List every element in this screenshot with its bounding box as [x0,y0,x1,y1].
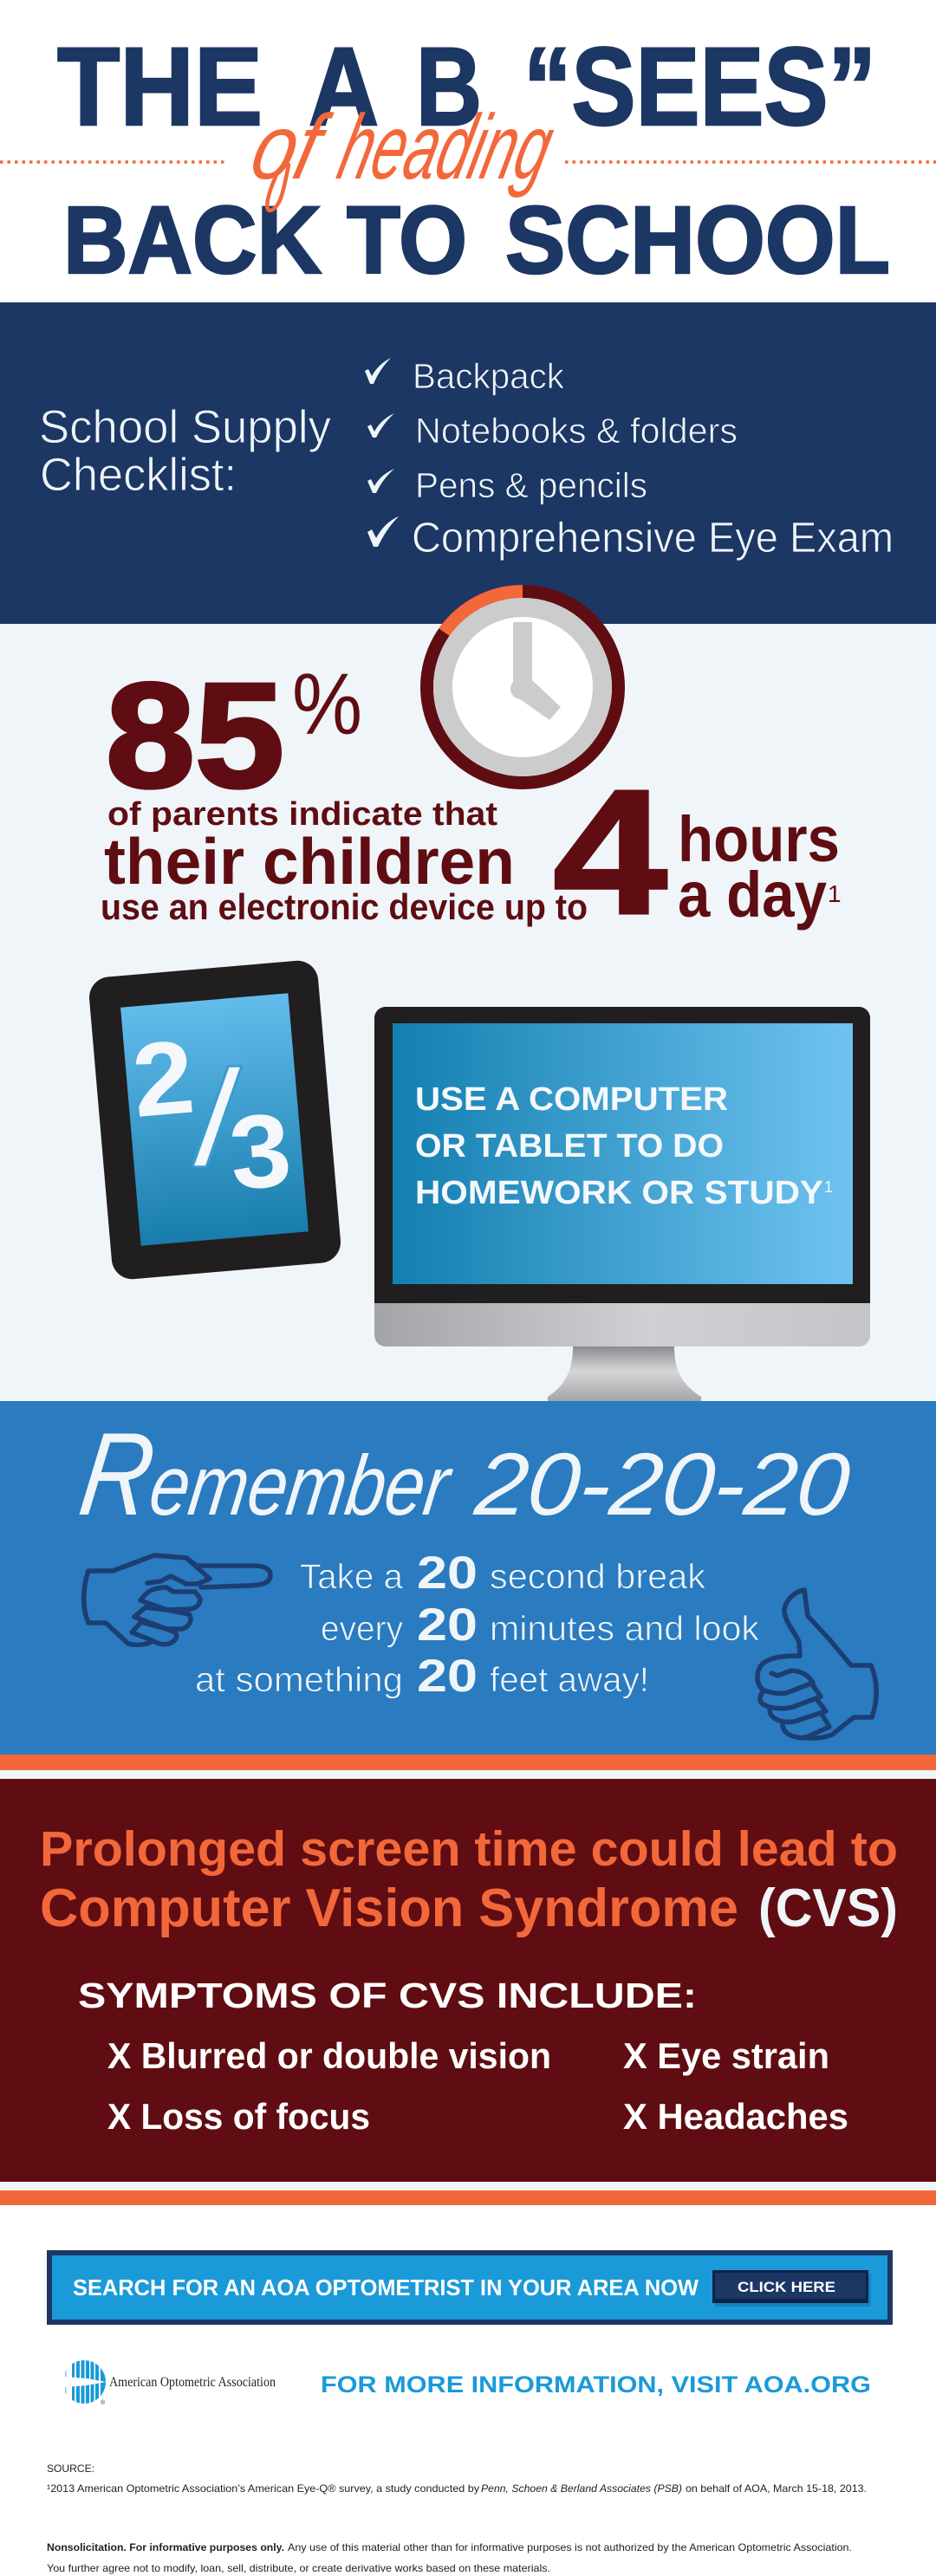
symptoms list: X Blurred or double vision [107,2035,551,2076]
title line 2: TO [347,187,467,294]
title line 1: B [416,25,482,149]
check marks [365,358,399,547]
title line 2: BACK [63,187,322,294]
logo wordmark: American Optometric Association [109,2375,276,2390]
title line 1 [57,25,876,149]
20-20-20 rule text: 20 [417,1651,478,1702]
script subtitle: heading [329,95,563,198]
orange divider [0,2190,936,2205]
more information link: FOR MORE INFORMATION, VISIT AOA.ORG [321,2372,871,2398]
title block [0,25,936,294]
heading: remember: 20-20-20 [471,1434,855,1534]
checklist items [412,356,894,561]
icon: tablet with two thirds [88,959,342,1281]
title line 2 [63,187,890,294]
orange divider [0,1755,936,1770]
script subtitle [242,95,563,211]
logo mark: ® [101,2399,106,2406]
checklist items: Pens & pencils [415,465,647,505]
button: click here [712,2270,871,2307]
monitor caption: OR TABLET TO DO [415,1128,724,1165]
symptoms list: X Eye strain [623,2035,829,2076]
checklist items: Notebooks & folders [415,411,738,451]
icon: tablet with two thirds: 3 [225,1091,296,1212]
icon: pointing hand [84,1555,270,1645]
disclaimer [47,2541,852,2574]
monitor caption: HOMEWORK OR STUDY [415,1175,823,1211]
light divider gap [0,2182,936,2190]
heading: remember [73,1408,855,1540]
title line 2: SCHOOL [505,187,890,294]
statistic: 85 percent: % [292,656,362,753]
statistic: 4 hours a day: 4 [553,753,667,951]
title line 1: THE [57,25,263,149]
monitor caption [415,1081,833,1211]
20-20-20 rule text [195,1548,760,1702]
symptoms heading: SYMPTOMS OF CVS INCLUDE: [78,1976,697,2015]
disclaimer: Any use of this material other than for informative purposes is not authorized by the American Optometric Association. [288,2541,852,2553]
monitor caption: 1 [824,1178,833,1196]
statistic: 85 percent: of parents indicate that [107,796,497,833]
panel: school supply checklist [0,302,936,624]
statistic: 4 hours a day: hours [678,803,840,875]
20-20-20 rule text: Take a [300,1558,404,1596]
source note [47,2462,867,2495]
checklist items: Backpack [413,356,564,396]
button: click here: CLICK HERE [738,2279,835,2295]
panel: screen use statistics [0,591,936,1401]
checklist heading: School Supply [39,401,331,453]
20-20-20 rule text: 20 [417,1599,478,1651]
icon: clock [426,591,619,783]
panel: remember 20-20-20 [0,1401,936,1755]
statistic: 4 hours a day [553,753,842,951]
heading: prolonged screen time: (CVS) [758,1878,898,1938]
banner: search for an optometrist [49,2253,890,2322]
title line 1: A [309,25,379,149]
banner text: SEARCH FOR AN AOA OPTOMETRIST IN YOUR AREA NOW [73,2274,699,2300]
icon: desktop monitor [374,1007,870,1401]
icon: thumbs up [757,1590,876,1738]
heading: prolonged screen time [40,1821,898,1938]
20-20-20 rule text: at something [195,1661,403,1699]
dotted rule [0,160,936,164]
20-20-20 rule text: feet away! [490,1661,649,1699]
20-20-20 rule text: every [321,1610,403,1648]
panel: computer vision syndrome [0,1779,936,2182]
logo: american optometric association [64,2360,276,2406]
icon: tablet with two thirds: / [192,1042,242,1195]
source note: ¹2013 American Optometric Association’s American Eye-Q® survey, a study conducted by [47,2482,479,2495]
symptoms list: X Headaches [623,2096,848,2137]
source note: Penn, Schoen & Berland Associates (PSB) [481,2482,682,2495]
disclaimer: You further agree not to modify, loan, sell, distribute, or create derivative works based on these materials. [47,2562,550,2574]
statistic: 85 percent: their children [104,825,515,898]
20-20-20 rule text: minutes and look [490,1610,760,1648]
heading: prolonged screen time: Prolonged screen time could lead to [40,1821,898,1877]
script subtitle: of [242,95,339,198]
statistic: 4 hours a day: 1 [828,880,842,907]
statistic: 85 percent [101,652,588,927]
checklist heading [39,401,331,501]
checklist items: Comprehensive Eye Exam [412,515,894,561]
20-20-20 rule text: 20 [417,1548,478,1599]
title line 1: “SEES” [523,25,876,149]
logo mark [64,2360,107,2406]
source note: SOURCE: [47,2462,94,2475]
monitor caption: USE A COMPUTER [415,1081,728,1118]
light divider gap [0,1770,936,1779]
heading: remember: Remember [73,1408,463,1540]
source note: on behalf of AOA, March 15-18, 2013. [686,2482,867,2495]
icon: tablet with two thirds: 2 [128,1018,198,1139]
statistic: 85 percent: 85 [106,652,284,819]
checklist heading: Checklist: [40,449,237,501]
heading: prolonged screen time: Computer Vision Syndrome [40,1878,738,1938]
disclaimer: Nonsolicitation. For informative purposes only. [47,2541,284,2553]
20-20-20 rule text: second break [490,1558,706,1596]
symptoms list: X Loss of focus [107,2096,370,2137]
statistic: 4 hours a day: a day [678,859,827,931]
symptoms list [107,2035,848,2137]
statistic: 85 percent: use an electronic device up to [101,886,588,927]
